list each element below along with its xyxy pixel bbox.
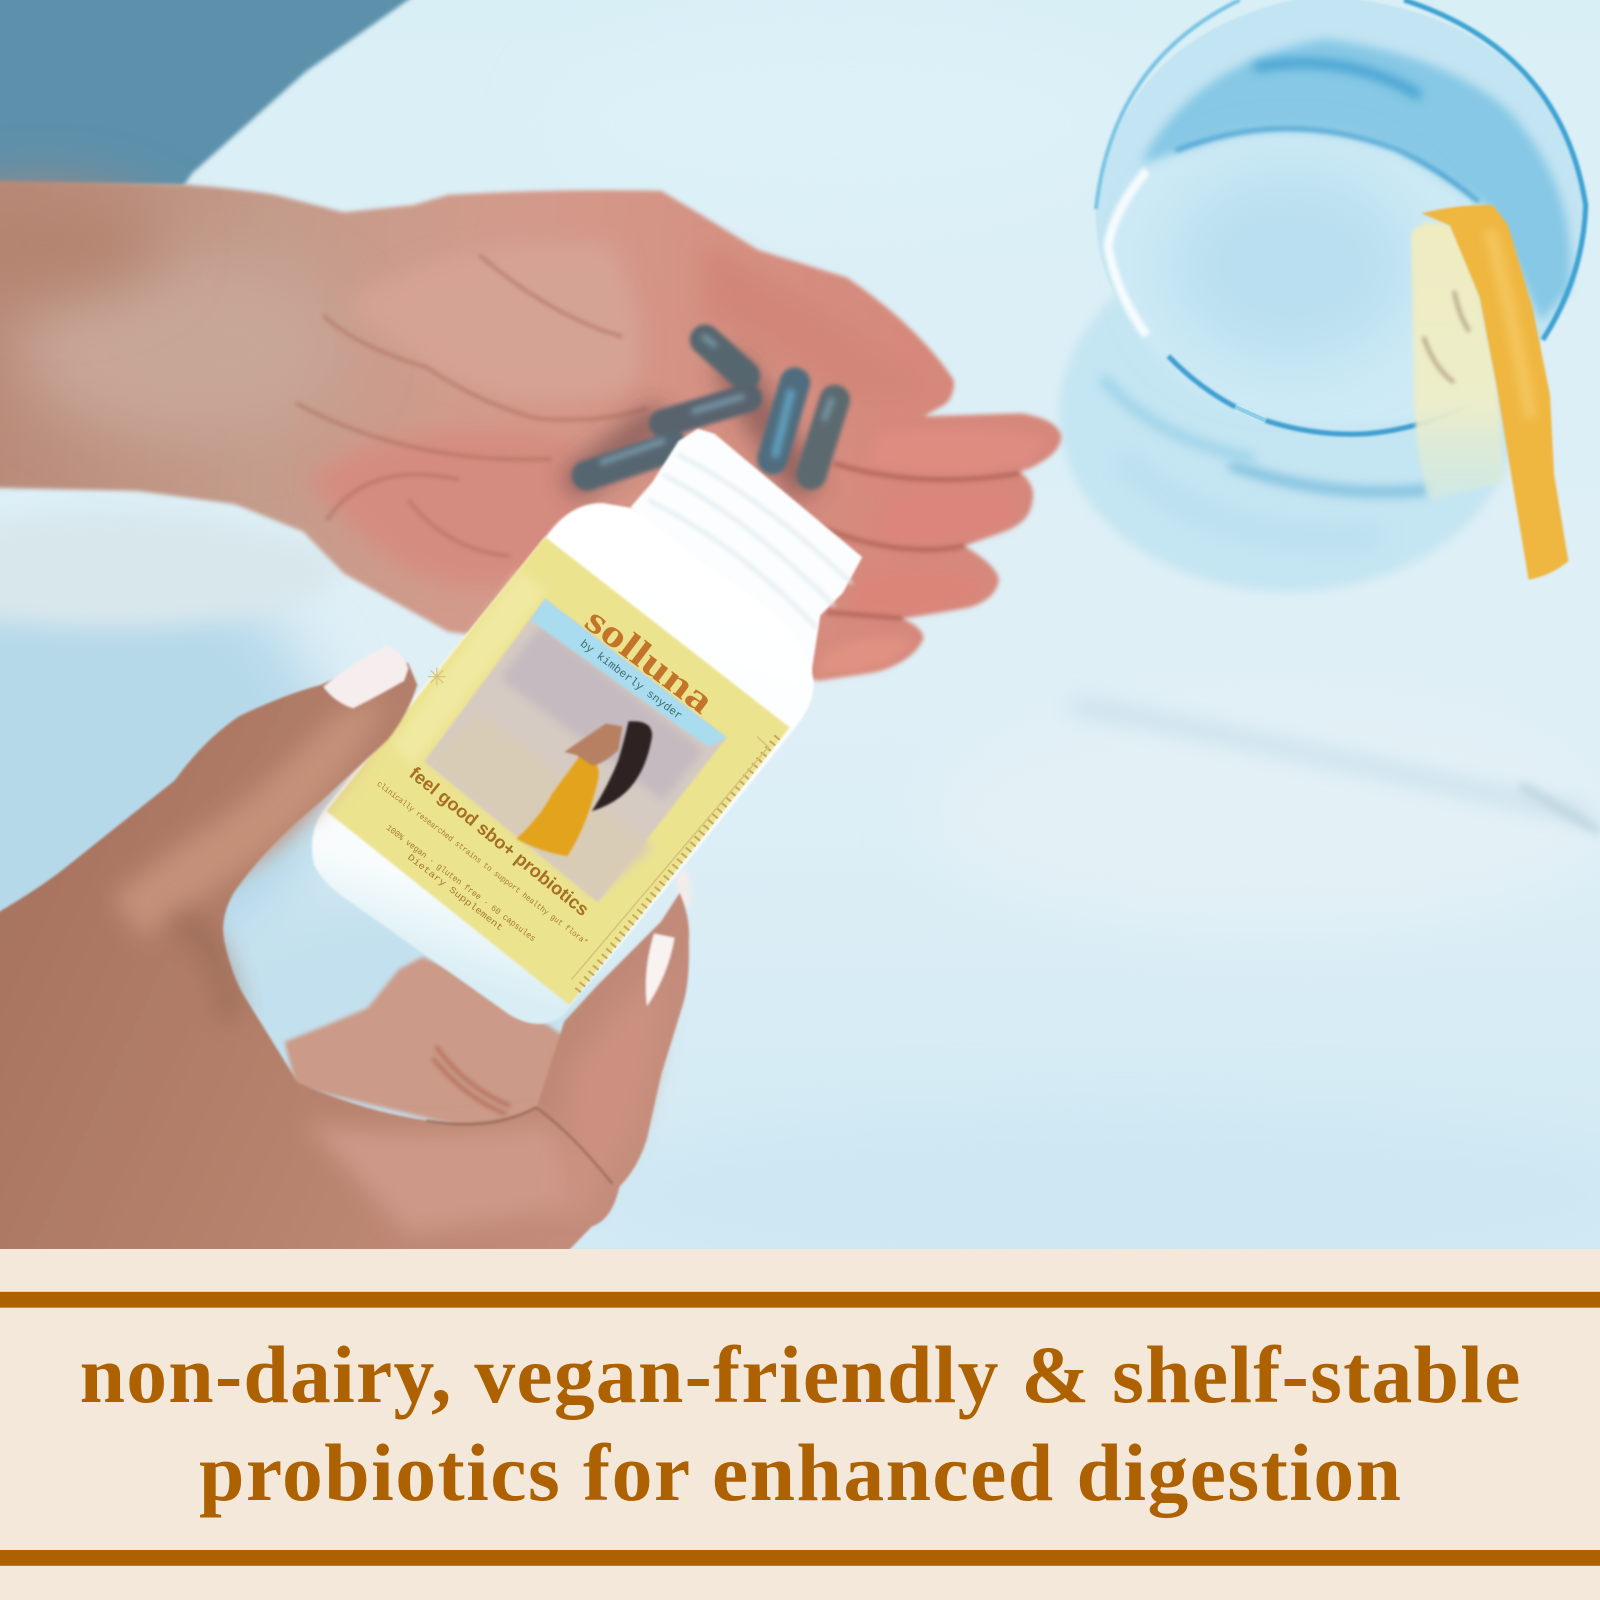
glass body below the rim xyxy=(1057,296,1508,594)
thumb nail xyxy=(323,646,408,708)
lemon slice xyxy=(1411,205,1568,580)
dotted label edge xyxy=(577,737,778,992)
marble table background xyxy=(0,0,1600,1276)
caption banner xyxy=(0,1249,1600,1600)
sun icon: ✳ xyxy=(427,663,447,692)
rim front arc xyxy=(1168,356,1236,407)
finger separators xyxy=(816,463,1019,618)
glass interior xyxy=(1096,0,1584,342)
photo: hands, bottle and glass of water xyxy=(0,0,1600,1276)
dark blue cushion, top left xyxy=(0,0,422,186)
water glass xyxy=(1059,0,1586,592)
brand name: solluna xyxy=(577,599,722,722)
caption text line 2: probiotics for enhanced digestion xyxy=(199,1427,1401,1518)
water surface xyxy=(1112,136,1500,429)
lower hand holding bottle xyxy=(0,646,689,1255)
hidden finger nail xyxy=(676,869,692,910)
caption text line 1: non-dairy, vegan-friendly & shelf-stable xyxy=(80,1329,1520,1420)
supplement bottle xyxy=(312,429,862,1024)
yellow label xyxy=(327,537,790,1005)
bottom rule xyxy=(0,1550,1600,1566)
knuckle shadow xyxy=(173,918,230,1020)
bottle neck and threads xyxy=(631,429,862,673)
thumb highlight xyxy=(112,694,388,939)
deep blue water band xyxy=(1141,39,1570,321)
lower palm highlight xyxy=(306,1122,592,1235)
sky strip xyxy=(531,599,727,747)
capsules xyxy=(582,337,835,480)
capsule highlights xyxy=(776,393,791,454)
finger nail xyxy=(646,934,674,1006)
palm shading xyxy=(365,248,638,394)
palm creases xyxy=(296,255,647,556)
supplement line: Dietary Supplement xyxy=(405,852,505,933)
ring on finger xyxy=(433,1046,510,1114)
upper hand and forearm xyxy=(0,181,1061,681)
skin creases xyxy=(427,1107,612,1184)
label photo xyxy=(424,599,727,902)
fingers xyxy=(1022,465,1036,472)
lower hand fingers behind bottle xyxy=(285,869,692,1143)
woman in yellow dress xyxy=(516,752,599,856)
top rule xyxy=(0,1292,1600,1308)
product description: clinically researched strains to support healthy gut flora* xyxy=(375,779,590,947)
product name: feel good sbo+ probiotics xyxy=(406,762,593,920)
white highlight on rim xyxy=(1108,170,1147,336)
forearm mottling xyxy=(20,255,347,439)
brand tagline: by kimberly snyder xyxy=(577,639,684,723)
rim outer arc xyxy=(1096,0,1240,209)
bottle body xyxy=(312,503,814,1024)
product claims: 100% vegan · gluten free · 60 capsules xyxy=(384,823,537,944)
